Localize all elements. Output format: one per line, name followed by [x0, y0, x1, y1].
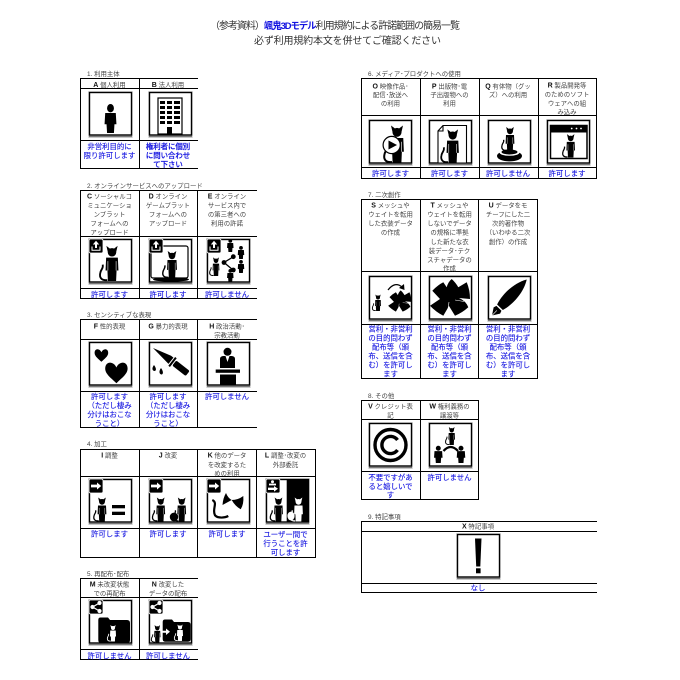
header U	[486, 200, 531, 246]
header A: A 個人利用	[93, 80, 126, 89]
header H: 宗教活動	[214, 330, 240, 340]
icon: software window	[546, 119, 591, 166]
header K	[208, 450, 246, 478]
value B: て下さい	[153, 160, 183, 169]
header M: での再配布	[94, 588, 126, 598]
header E: の第三者への	[208, 210, 246, 218]
header Q: Q 有体物（グッ	[485, 82, 531, 90]
header N: N 改変した	[152, 580, 184, 588]
value U: 布、送信を含	[486, 352, 531, 360]
panel: 7 二次創作	[362, 190, 538, 379]
value W: 許可しません	[427, 473, 472, 482]
value G: うこと）	[153, 419, 183, 428]
header V: V クレジット表	[368, 402, 414, 410]
icon: hearts	[88, 341, 133, 388]
header S	[368, 202, 413, 236]
header W: 譲渡等	[440, 410, 460, 420]
value S: ます	[383, 370, 398, 378]
value T	[427, 324, 472, 378]
header T: 作成	[443, 264, 456, 272]
value P: 許可します	[431, 169, 468, 178]
value A: 非営利目的に	[87, 142, 132, 151]
header W: W 権利義務の	[429, 402, 470, 410]
header C: C ソーシャルコ	[87, 192, 132, 200]
header U: （いわゆる二次	[486, 228, 531, 236]
value V	[368, 473, 413, 500]
header U: 次的著作物	[492, 218, 525, 228]
value A: 限り許可します	[84, 151, 135, 160]
value D: 許可します	[150, 290, 186, 299]
icon: person	[88, 91, 133, 138]
value B: に問い合わせ	[146, 151, 190, 160]
icon: third party sharing	[206, 238, 251, 285]
value N: 許可しません	[146, 652, 190, 660]
header U: U データをモ	[489, 200, 527, 210]
header P: P 出版物･電	[432, 82, 468, 90]
header E: 利用の許諾	[211, 218, 244, 228]
header S: の作成	[381, 228, 401, 236]
header D: フォームへの	[149, 210, 187, 218]
header N: データの配布	[149, 588, 188, 598]
header R: ウェアへの組	[548, 98, 587, 108]
header C: ミュニケーショ	[87, 202, 132, 210]
value F: うこと）	[95, 419, 124, 428]
value S: の目的問わず	[368, 334, 413, 342]
header R: み込み	[557, 108, 577, 116]
section heading 4: 4. 加工	[87, 439, 107, 448]
header C: フォームへの	[90, 220, 129, 228]
header Q: ズ）への利用	[489, 90, 527, 99]
icon: knife	[148, 341, 193, 388]
header T: スチャデータの	[427, 255, 472, 264]
icon: cat to clothing	[368, 275, 413, 322]
header B: B 法人利用	[152, 80, 184, 89]
header M: M 未改変状態	[90, 580, 130, 588]
header R: R 製品開発等	[548, 80, 587, 90]
header P: 利用	[443, 98, 456, 108]
header K: K 他のデータ	[208, 450, 246, 460]
header L: 外部委託	[273, 460, 299, 469]
section heading 5: 5. 再配布･配布	[87, 569, 130, 578]
header K: を改変するた	[208, 460, 246, 469]
value Q: 許可しません	[486, 169, 530, 178]
title: 必ず利用規約本文を併せてご確認ください	[254, 34, 441, 47]
value E: 許可しません	[205, 290, 249, 299]
panel: 1 利用主体	[80, 69, 198, 169]
header T	[427, 202, 472, 272]
icon: share modified data	[148, 599, 193, 646]
value V: す	[387, 490, 394, 500]
header S: した衣装データ	[368, 218, 413, 228]
header W	[429, 402, 470, 420]
header S: S メッシュや	[371, 202, 410, 210]
icon: modify cat	[148, 478, 193, 525]
panel: 4 加工	[80, 439, 316, 558]
header R	[545, 80, 589, 116]
header O: の利用	[381, 98, 400, 108]
header E: サービス内で	[208, 200, 246, 210]
icon: figure on stand	[487, 119, 532, 166]
header F: F 性的表現	[94, 322, 126, 330]
value T: 布、送信を含	[427, 352, 472, 360]
value T: ます	[442, 370, 457, 378]
header O: 配信･放送へ	[373, 90, 409, 99]
panel: 2 オンラインサービスへのアップロード	[80, 181, 257, 299]
panel: 9 特記事項	[362, 512, 597, 593]
value F: 許可します	[91, 392, 128, 401]
value B	[146, 142, 190, 169]
value F: （ただし棲み	[87, 401, 132, 410]
value I: 許可します	[91, 530, 128, 538]
header U: チーフにした二	[486, 210, 531, 218]
section heading 9: 9. 特記事項	[368, 512, 401, 521]
header T: ウェイトを転用	[427, 210, 472, 218]
value B: 権利者に個別	[146, 142, 190, 151]
icon: speaker at podium	[206, 341, 251, 388]
value T: の目的問わず	[427, 334, 472, 342]
header E: E オンライン	[208, 192, 246, 200]
header T: の規格に準拠	[430, 228, 469, 236]
header L: L 調整･改変の	[265, 450, 306, 460]
value S: む）を許可し	[368, 360, 413, 370]
value T: 配布等（頒	[431, 342, 469, 352]
header C: ンプラット	[94, 210, 125, 218]
header O: O 映像作品･	[372, 82, 408, 90]
header C: アップロード	[90, 228, 129, 236]
section heading 7: 7. 二次創作	[368, 190, 401, 199]
icon: outsourcing	[265, 478, 310, 525]
header D: アップロード	[149, 220, 187, 228]
icon: adjust equals	[88, 478, 133, 525]
value U: む）を許可し	[486, 360, 530, 370]
value J: 許可します	[150, 530, 186, 538]
value G	[146, 392, 190, 428]
header P: 子出版物への	[430, 90, 469, 99]
header L	[265, 450, 306, 469]
section heading 2: 2. オンラインサービスへのアップロード	[87, 181, 203, 190]
header K: めの利用	[214, 468, 240, 478]
icon: upload cat	[88, 238, 133, 285]
value L	[263, 530, 308, 557]
section heading 3: 3. センシティブな表現	[87, 310, 152, 319]
value M: 許可しません	[87, 652, 132, 660]
header Q	[485, 82, 531, 99]
value K: 許可します	[209, 530, 245, 538]
icon: bow with tail	[206, 478, 251, 525]
panel: 3 センシティブな表現	[80, 310, 257, 428]
panel: 8 その他	[362, 391, 479, 500]
icon: share folder	[88, 599, 133, 646]
header T: した新たな衣	[430, 237, 469, 246]
header D: D オンライン	[149, 192, 187, 200]
header E	[208, 192, 246, 228]
header P	[430, 82, 469, 108]
header T: T メッシュや	[430, 202, 469, 210]
header H	[209, 322, 245, 340]
header H: H 政治活動･	[209, 322, 245, 330]
value R: 許可します	[549, 169, 585, 178]
section heading 1: 1. 利用主体	[87, 69, 120, 78]
value L: 可します	[271, 548, 300, 557]
header D: ゲームプラット	[146, 200, 190, 210]
value U: 営利・非営利	[486, 324, 530, 334]
value U: ます	[501, 370, 515, 378]
header X: X 特記事項	[462, 522, 495, 530]
header V: 記	[387, 412, 394, 420]
value U: 配布等（頒	[490, 342, 527, 352]
value F	[87, 392, 132, 428]
section heading 6: 6. メディア･プロダクトへの使用	[368, 69, 461, 78]
header U: 創作）の作成	[489, 237, 528, 246]
value U: の目的問わず	[486, 334, 530, 342]
header M	[90, 580, 130, 598]
header T: 装データ･テク	[429, 246, 470, 255]
value S: 布、送信を含	[368, 352, 413, 360]
value G: （ただし棲み	[146, 401, 190, 410]
value G: 許可します	[150, 392, 186, 401]
value L: 行うことを許	[263, 539, 308, 548]
icon: publication	[428, 119, 473, 166]
header G: G 暴力的表現	[148, 322, 188, 330]
value S: 営利・非営利	[368, 324, 413, 334]
header S: ウェイトを転用	[368, 210, 413, 218]
icon: exclamation mark	[456, 533, 501, 580]
icon: office building	[148, 91, 193, 138]
panel: 6 メディア・プロダクトへの使用	[362, 69, 597, 179]
icon: cat with play button	[368, 119, 413, 166]
header C	[87, 192, 132, 236]
header R: のためのソフト	[545, 90, 589, 98]
value X: なし	[471, 584, 485, 592]
value A	[84, 142, 135, 160]
value S	[368, 324, 413, 378]
header O	[372, 82, 409, 108]
header T: しないでデータ	[427, 218, 472, 228]
icon: upload to game platform	[148, 238, 193, 285]
value U	[486, 324, 531, 378]
icon: clothing texture	[428, 275, 473, 322]
title: （参考資料）颯鬼3Dモデル利用規約による許諾範囲の簡易一覧	[210, 19, 460, 32]
header V	[368, 402, 414, 420]
value F: 分けはおこな	[87, 410, 132, 419]
value T: む）を許可し	[427, 360, 472, 370]
value H: 許可しません	[205, 392, 249, 401]
header N	[149, 580, 188, 598]
header D	[146, 192, 190, 228]
value C: 許可します	[91, 290, 128, 299]
value O: 許可します	[372, 169, 409, 178]
header I: I 調整	[101, 450, 118, 460]
value L: ユーザー間で	[263, 530, 308, 539]
value S: 配布等（頒	[372, 342, 410, 352]
panel: 5 再配布・配布	[80, 569, 198, 660]
section heading 8: 8. その他	[368, 391, 395, 400]
icon: copyright	[368, 422, 413, 469]
icon: rights transfer	[428, 422, 473, 469]
value G: 分けはおこな	[146, 410, 190, 419]
icon: fountain pen	[487, 275, 532, 322]
title	[210, 19, 460, 47]
value T: 営利・非営利	[427, 324, 472, 334]
value V: ると嬉しいで	[368, 482, 413, 491]
value V: 不要ですがあ	[368, 473, 413, 482]
header J: J 改変	[159, 450, 178, 460]
